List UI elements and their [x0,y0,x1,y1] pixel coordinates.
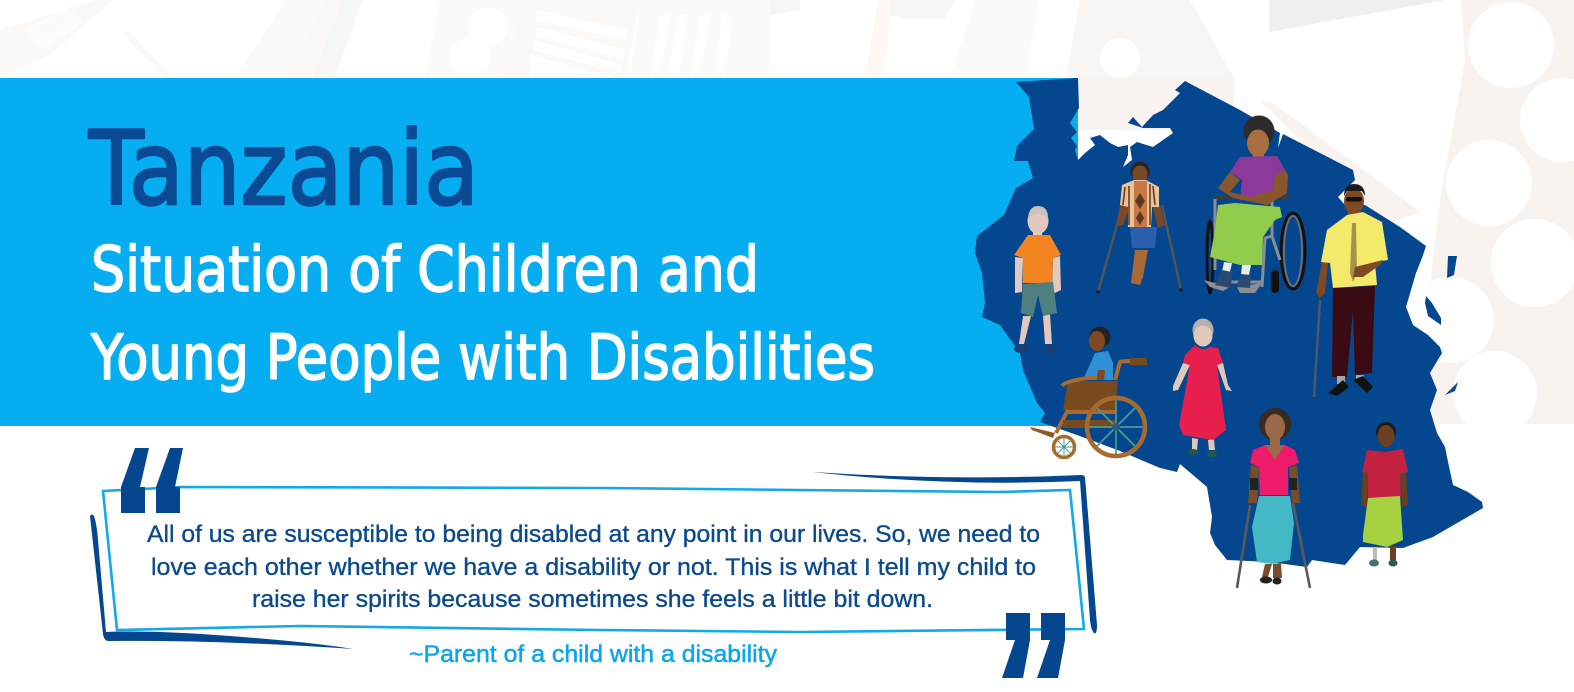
figure: older woman in red dress [1173,318,1232,457]
figure: girl in red with prosthetic leg [1361,422,1408,566]
figure: boy in brown wheelchair [1030,326,1147,458]
figure: woman in wheelchair [1204,116,1305,293]
heading: Tanzania: Tanzania [88,110,479,229]
blue title banner [0,78,1078,426]
subtitle line 1: Situation of Children and [91,233,759,306]
quote text: All of us are susceptible to being disabled at any point in our lives. So, we need to [147,521,1040,548]
title [88,110,875,394]
figure: woman in pink with crutches [1237,408,1310,588]
figure: boy in orange shirt [1014,206,1061,353]
map of Tanzania [975,78,1483,567]
quote text [147,521,1040,613]
closing quote mark [1002,613,1065,678]
quote text: love each other whether we have a disability or not. This is what I tell my child to [151,554,1036,581]
subtitle line 2: Young People with Disabilities [90,321,875,394]
background pattern [0,0,1574,435]
quote text: raise her spirits because sometimes she feels a little bit down. [252,586,933,613]
islands [1447,256,1457,278]
figure: boy with crutches [1096,162,1183,294]
quote frame [90,472,1097,649]
opening quote mark [121,448,183,513]
quote attribution: ~Parent of a child with a disability [409,641,777,668]
figure: man with cane [1314,184,1388,397]
